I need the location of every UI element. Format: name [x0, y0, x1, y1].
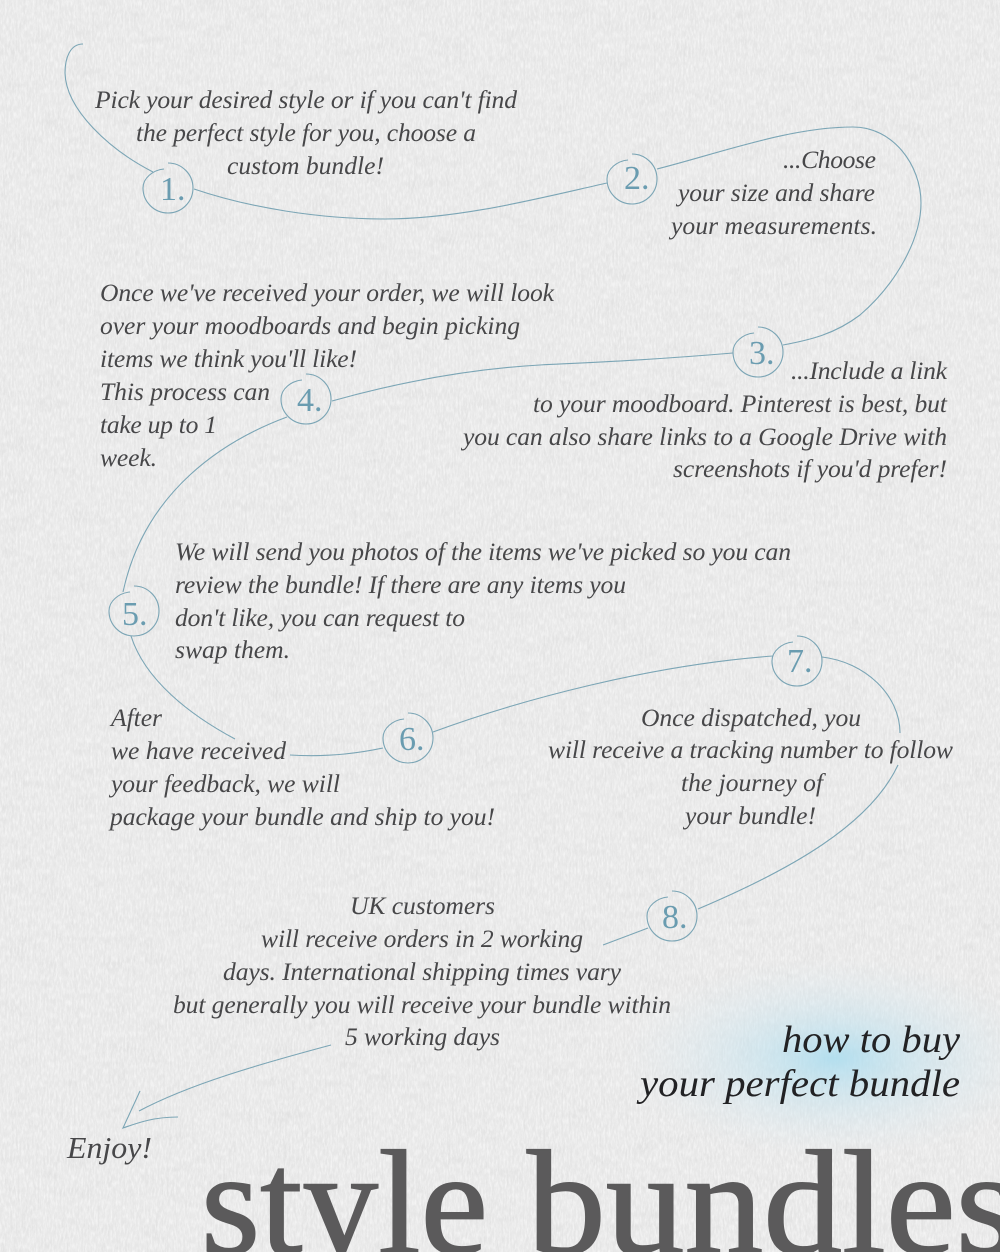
connecting path: step 3 to step 4: [332, 353, 733, 401]
step 4 text: Once we've received your order, we will look: [100, 278, 555, 307]
subtitle: how to buy your perfect bundle: how to buy: [782, 1019, 960, 1061]
big title: style bundles: [201, 1121, 1000, 1252]
step 8 text: UK customers: [350, 891, 495, 920]
step 7 text: your bundle!: [682, 801, 816, 830]
step 8 marker: 8.: [662, 899, 688, 936]
connecting path: start to step 1: [65, 44, 153, 172]
step 6 marker: 6.: [399, 721, 424, 758]
step 6 text: After: [109, 703, 163, 732]
arrow to Enjoy: [123, 1045, 331, 1128]
step 2 marker: 2.: [624, 160, 650, 197]
step 6 text: we have received: [111, 736, 286, 765]
step 1 text: [94, 85, 517, 180]
step 4 marker: 4.: [297, 382, 322, 419]
blue glow behind subtitle: [620, 958, 1000, 1158]
step 7 marker: [772, 636, 822, 686]
step 1 text: custom bundle!: [227, 151, 384, 180]
step 8 text: will receive orders in 2 working: [261, 924, 583, 953]
step 4 marker: [281, 374, 331, 424]
step 6 text: [108, 703, 495, 831]
step 3 text: [460, 356, 948, 483]
step 3 text: screenshots if you'd prefer!: [673, 454, 947, 483]
connecting path: step 6 to step 7: [433, 656, 773, 732]
step 5 text: review the bundle! If there are any items you: [175, 570, 626, 599]
step 3 text: to your moodboard. Pinterest is best, but: [533, 389, 948, 418]
step 2 marker: [607, 154, 657, 204]
connecting path: step 7 to step 8: [698, 657, 900, 909]
connecting path: step 8 to text: [603, 928, 648, 945]
connecting path: step 1 to step 2: [194, 183, 607, 219]
step 7 marker: 7.: [787, 643, 812, 680]
step 4 text: week.: [100, 443, 157, 472]
step 7 text: [548, 703, 953, 830]
step 8 text: but generally you will receive your bundle within: [173, 990, 671, 1019]
step 2 text: ...Choose: [783, 145, 876, 174]
step 1 text: the perfect style for you, choose a: [136, 118, 476, 147]
step 7 text: the journey of: [681, 768, 827, 797]
connecting path: step 2 to step 3: [657, 127, 921, 345]
step 5 text: [175, 537, 791, 664]
step 5 marker: 5.: [122, 596, 148, 633]
step 7 text: will receive a tracking number to follow: [548, 735, 953, 764]
step 5 marker: [109, 586, 159, 636]
step 5 text: swap them.: [175, 635, 290, 664]
step 1 marker: 1.: [160, 171, 186, 208]
step 6 text: your feedback, we will: [108, 769, 340, 798]
subtitle: how to buy your perfect bundle: [636, 1019, 960, 1105]
step 6 text: package your bundle and ship to you!: [108, 802, 495, 831]
step 8 text: 5 working days: [345, 1022, 500, 1051]
step 7 text: Once dispatched, you: [641, 703, 861, 732]
step 3 text: you can also share links to a Google Drive with: [460, 422, 947, 451]
step 4 text: take up to 1: [100, 410, 217, 439]
step 1 text: Pick your desired style or if you can't find: [94, 85, 517, 114]
step 4 text: This process can: [100, 377, 270, 406]
step 2 text: [668, 145, 877, 240]
connecting path: step 4 to step 5: [123, 417, 287, 592]
step 2 text: your measurements.: [668, 211, 877, 240]
step 1 marker: [143, 163, 193, 213]
step 4 text: items we think you'll like!: [100, 344, 357, 373]
step 3 text: ...Include a link: [791, 356, 948, 385]
step 4 text: over your moodboards and begin picking: [100, 311, 520, 340]
step 8 text: days. International shipping times vary: [223, 957, 622, 986]
step 6 marker: [383, 713, 433, 763]
step 4 text: [100, 278, 555, 472]
closing text: Enjoy!: Enjoy!: [66, 1130, 152, 1165]
subtitle: how to buy your perfect bundle: your perfect bundle: [636, 1063, 960, 1105]
step 8 marker: [647, 891, 697, 941]
step 8 text: [173, 891, 671, 1051]
connecting path: step 5 to step 6: [131, 636, 383, 756]
step 3 marker: 3.: [749, 335, 774, 372]
step 2 text: your size and share: [675, 178, 875, 207]
step 5 text: We will send you photos of the items we've picked so you can: [175, 537, 791, 566]
step 3 marker: [733, 327, 783, 377]
step 5 text: don't like, you can request to: [175, 603, 465, 632]
